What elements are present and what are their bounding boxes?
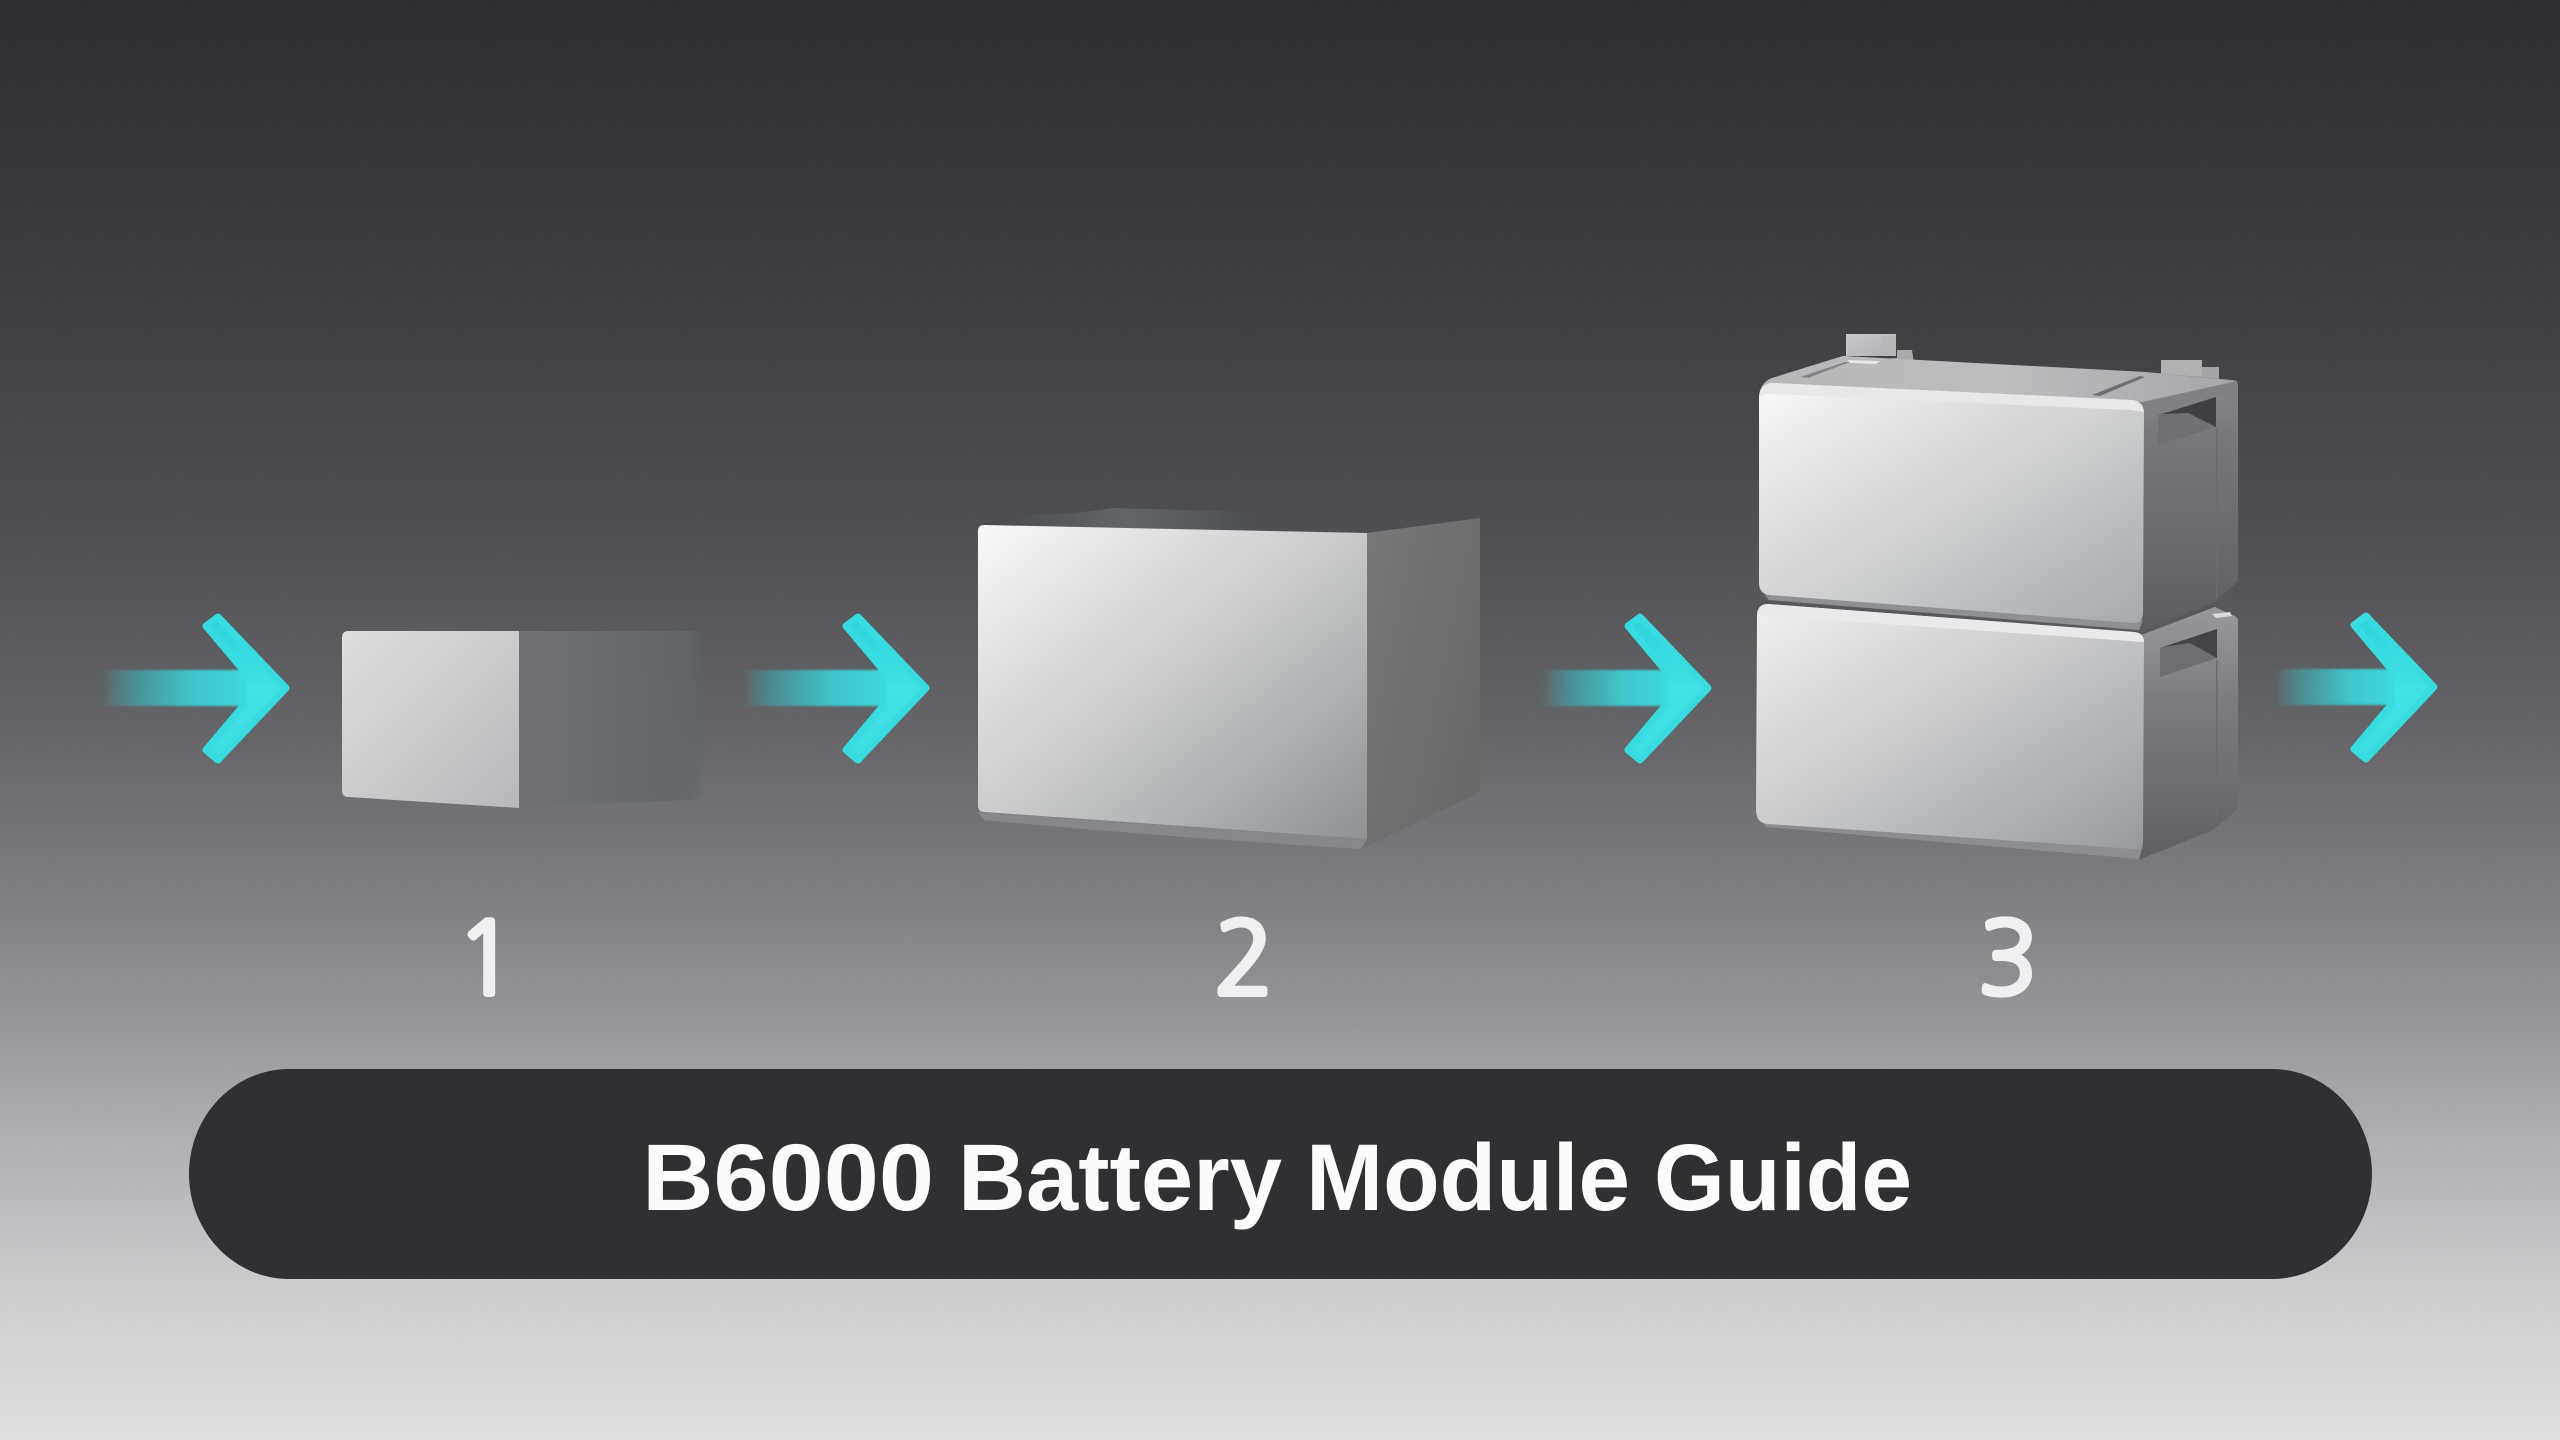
terminal right <box>2161 360 2219 382</box>
upper module <box>1759 356 2238 630</box>
arrow 1 <box>101 617 286 760</box>
step 3: stacked battery modules <box>1756 334 2238 859</box>
title text: Battery <box>958 1125 1282 1231</box>
title text: B6000 <box>642 1125 934 1231</box>
arrow 2 <box>743 617 926 760</box>
arrow 3 <box>1541 617 1708 760</box>
title text <box>642 1125 1912 1231</box>
step number 1: 1 <box>456 909 516 1009</box>
terminal left <box>1846 334 1914 366</box>
title pill <box>189 1069 2372 1279</box>
arrow 4 <box>2275 616 2434 759</box>
title text: Module <box>1306 1125 1630 1231</box>
step 1: small cube <box>342 631 704 808</box>
step 2: large cube <box>978 508 1480 849</box>
title text: Guide <box>1654 1125 1912 1231</box>
step number 3: 3 <box>1978 909 2038 1009</box>
step number 2: 2 <box>1214 909 1274 1009</box>
lower module <box>1756 604 2238 859</box>
